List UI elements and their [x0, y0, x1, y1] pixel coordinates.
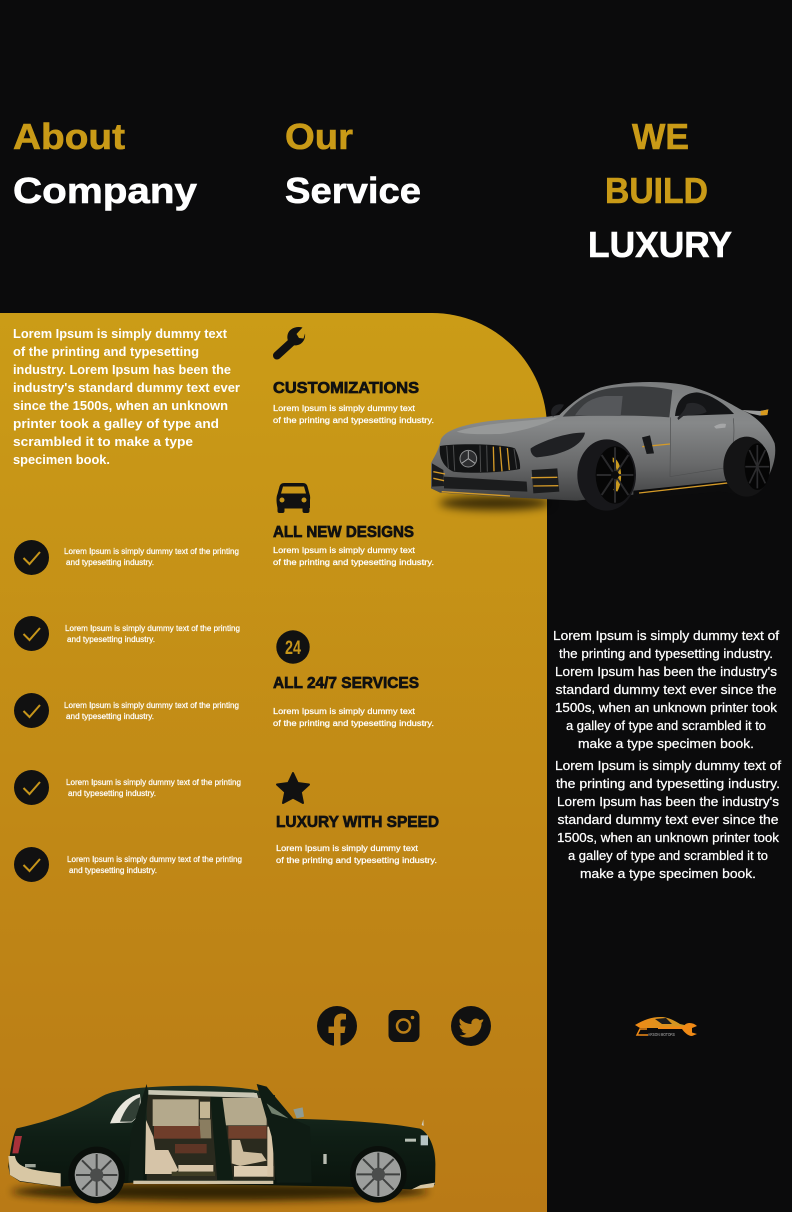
checklist item 4: Lorem Ipsum is simply dummy text of the printing: [66, 778, 241, 787]
service: luxury with speed: [276, 814, 439, 865]
text block: right column first paragraph: Lorem Ipsum is simply dummy text of: [553, 628, 779, 643]
service: customizations: Lorem Ipsum is simply dummy text: [273, 403, 416, 413]
text block: company intro: industry's standard dummy text ever: [13, 381, 240, 395]
service: all 24/7 services: [273, 675, 434, 728]
text block: right column second paragraph: a galley of type and scrambled it to: [568, 848, 768, 863]
checklist item 2: [14, 616, 240, 651]
checklist item 1: and typesetting industry.: [66, 558, 154, 567]
heading: About Company: About: [13, 116, 125, 157]
service: customizations: [273, 380, 434, 425]
icon: 24 hours: [276, 630, 310, 664]
heading: Our Service: Our: [285, 116, 353, 157]
checklist item 4: and typesetting industry.: [68, 789, 156, 798]
checklist item 2: and typesetting industry.: [67, 635, 155, 644]
panel: gold curved background: [0, 313, 547, 1212]
checklist item 5: [14, 847, 242, 882]
heading: We Build Luxury: WE: [632, 116, 689, 157]
text block: company intro: industry. Lorem Ipsum has been the: [13, 363, 231, 377]
checklist item 5: Lorem Ipsum is simply dummy text of the printing: [67, 855, 242, 864]
text block: right column second paragraph: [555, 758, 781, 881]
logo: Carson Motors: ARSON MOTORS: [648, 1032, 675, 1037]
heading: About Company: [13, 116, 197, 211]
logo: Carson Motors: [635, 1017, 697, 1037]
text block: right column second paragraph: Lorem Ipsum is simply dummy text of: [555, 758, 781, 773]
service: customizations: CUSTOMIZATIONS: [273, 380, 419, 397]
text block: right column second paragraph: standard dummy text ever since the: [558, 812, 778, 827]
checklist item 5: and typesetting industry.: [69, 866, 157, 875]
text block: company intro: of the printing and typesetting: [13, 345, 199, 359]
car: dark green limousine with open doors: [8, 1084, 435, 1203]
checklist item 3: Lorem Ipsum is simply dummy text of the printing: [64, 701, 239, 710]
text block: right column second paragraph: Lorem Ipsum has been the industry's: [557, 794, 779, 809]
checklist item 1: Lorem Ipsum is simply dummy text of the printing: [64, 547, 239, 556]
heading: We Build Luxury: [588, 116, 732, 265]
service: all 24/7 services: Lorem Ipsum is simply dummy text: [273, 706, 416, 716]
text block: right column first paragraph: 1500s, when an unknown printer took: [555, 700, 777, 715]
service: all new designs: Lorem Ipsum is simply dummy text: [273, 545, 416, 555]
icon: wrench: [277, 327, 305, 356]
checklist item 4: [14, 770, 241, 805]
text block: company intro: specimen book.: [13, 453, 110, 467]
heading: About Company: Company: [13, 170, 197, 211]
text block: right column second paragraph: the printing and typesetting industry.: [556, 776, 780, 791]
service: luxury with speed: Lorem Ipsum is simply dummy text: [276, 843, 419, 853]
text block: right column first paragraph: a galley of type and scrambled it to: [566, 718, 766, 733]
icon: facebook: [317, 1006, 357, 1046]
heading: We Build Luxury: LUXURY: [588, 224, 732, 265]
heading: We Build Luxury: BUILD: [605, 170, 708, 211]
service: all 24/7 services: of the printing and typesetting industry.: [273, 718, 434, 728]
icon: instagram: [388, 1010, 420, 1042]
service: all new designs: of the printing and typesetting industry.: [273, 557, 434, 567]
icon: star: [277, 773, 309, 803]
service: luxury with speed: LUXURY WITH SPEED: [276, 814, 439, 831]
text block: company intro: [13, 327, 240, 467]
checklist item 3: [14, 693, 239, 728]
text block: right column second paragraph: 1500s, when an unknown printer took: [557, 830, 779, 845]
heading: Our Service: Service: [285, 170, 421, 211]
service: luxury with speed: of the printing and typesetting industry.: [276, 855, 437, 865]
checklist item 2: Lorem Ipsum is simply dummy text of the printing: [65, 624, 240, 633]
text block: right column first paragraph: the printing and typesetting industry.: [559, 646, 773, 661]
icon: 24 hours: 24: [285, 638, 301, 659]
checklist item 1: [14, 540, 239, 575]
service: all new designs: ALL NEW DESIGNS: [273, 524, 414, 541]
service: customizations: of the printing and typesetting industry.: [273, 415, 434, 425]
text block: company intro: scrambled it to make a type: [13, 435, 193, 449]
icon: twitter: [451, 1006, 491, 1046]
checklist item 3: and typesetting industry.: [66, 712, 154, 721]
car: grey sports coupe: [431, 382, 775, 511]
text block: company intro: printer took a galley of type and: [13, 417, 219, 431]
text block: right column first paragraph: standard dummy text ever since the: [556, 682, 776, 697]
service: all new designs: [273, 524, 434, 567]
text block: right column second paragraph: make a type specimen book.: [580, 866, 756, 881]
heading: Our Service: [285, 116, 421, 211]
text block: right column first paragraph: [553, 628, 779, 751]
text block: company intro: since the 1500s, when an unknown: [13, 399, 228, 413]
text block: right column first paragraph: make a type specimen book.: [578, 736, 754, 751]
icon: car: [276, 483, 310, 513]
text block: right column first paragraph: Lorem Ipsum has been the industry's: [555, 664, 777, 679]
text block: company intro: Lorem Ipsum is simply dummy text: [13, 327, 228, 341]
service: all 24/7 services: ALL 24/7 SERVICES: [273, 675, 419, 692]
